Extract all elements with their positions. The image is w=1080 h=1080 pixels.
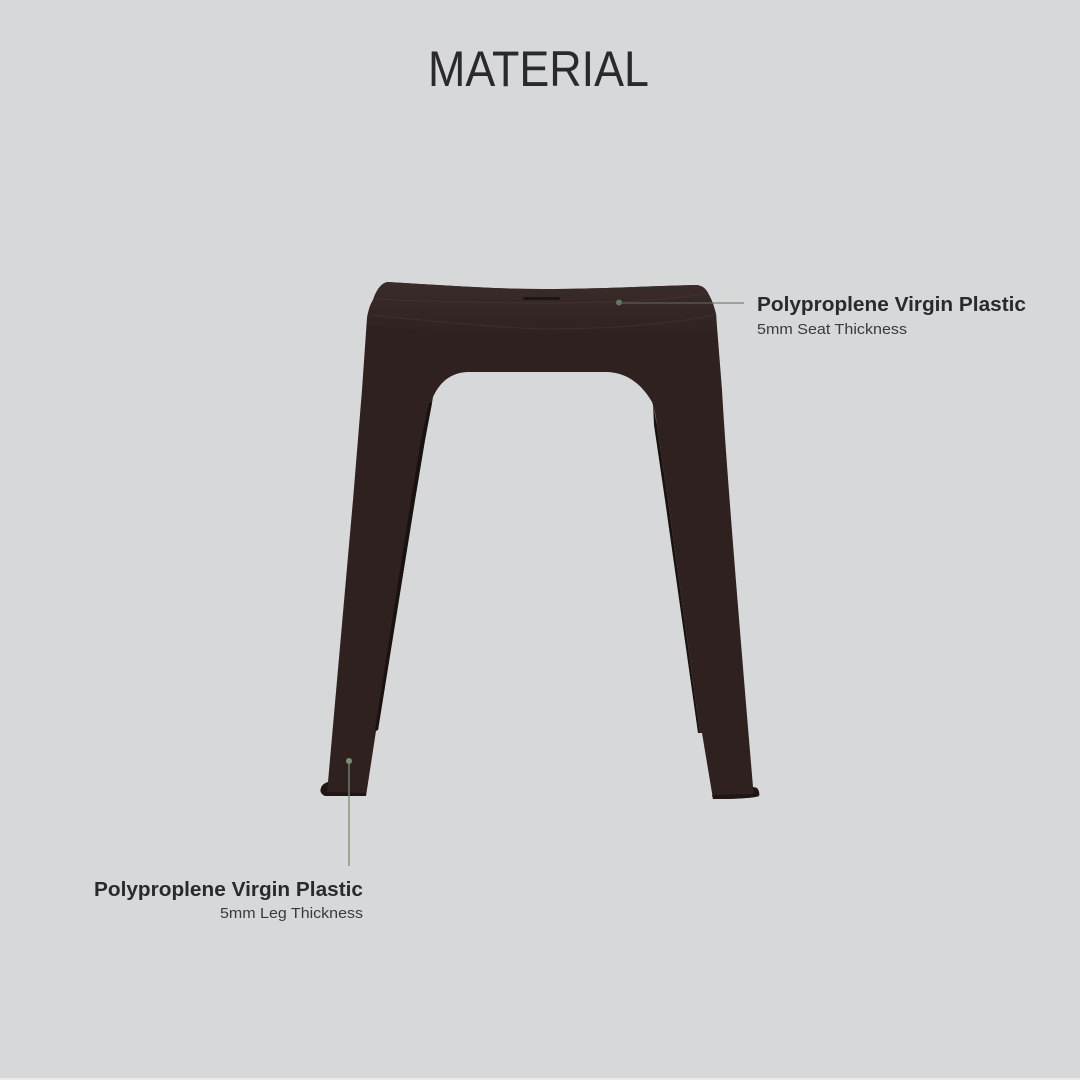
left leg inner edge	[375, 403, 432, 730]
leg thickness label: 5mm Leg Thickness	[220, 905, 363, 922]
right foot	[712, 787, 759, 799]
leg material label: Polyproplene Virgin Plastic	[94, 878, 363, 901]
right leg inner edge	[653, 404, 700, 733]
leg marker dot	[346, 758, 352, 764]
stool seat surface	[367, 282, 717, 333]
callout: seat	[616, 293, 1026, 338]
seat front edge	[371, 294, 714, 329]
seat material label: Polyproplene Virgin Plastic	[757, 293, 1026, 316]
seat thickness label: 5mm Seat Thickness	[757, 321, 907, 338]
seat centre handle slot	[523, 297, 560, 300]
left foot	[320, 782, 366, 796]
stool product image	[320, 282, 759, 799]
seat marker dot	[616, 300, 622, 306]
stool body	[320, 282, 759, 799]
title: MATERIAL	[428, 41, 649, 97]
leg leader line	[348, 761, 350, 866]
callout: leg	[94, 758, 363, 922]
seat leader line	[619, 302, 744, 304]
